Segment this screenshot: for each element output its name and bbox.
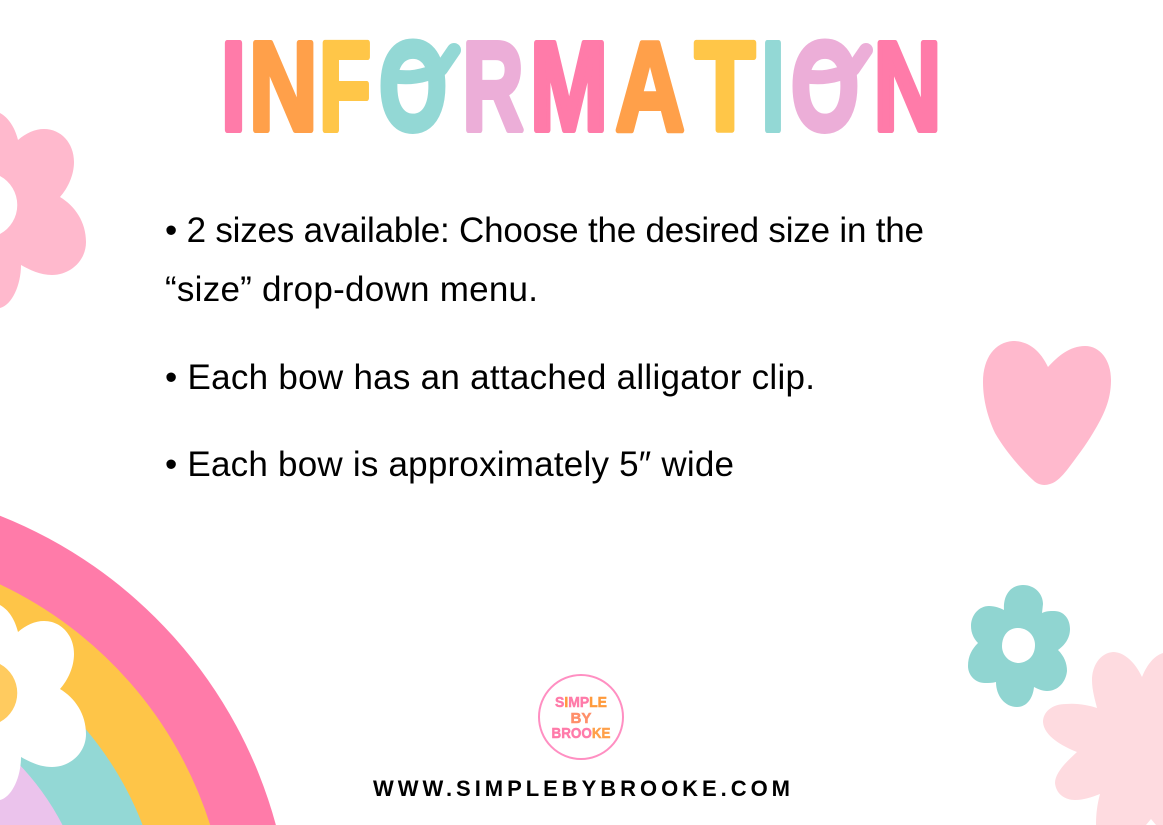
title [221, 16, 942, 157]
rainbow band: yellow [0, 584, 210, 825]
rainbow band: lilac [0, 746, 62, 825]
title: I [762, 16, 784, 157]
title: R [462, 16, 524, 157]
title: O [379, 16, 447, 157]
logo text: BY [570, 710, 592, 727]
bullet: sizes: • 2 sizes available: Choose the desired size in the [165, 211, 924, 250]
logo text: BROOKE [552, 725, 610, 742]
flower: pink top left [0, 113, 86, 308]
title: M [530, 16, 608, 157]
flower: white on rainbow [0, 605, 86, 800]
bullet: bow width: • Each bow is approximately 5″ wide [165, 445, 734, 484]
body text [165, 211, 924, 484]
flower: light pink bottom right [1043, 652, 1163, 825]
rainbow [0, 516, 276, 825]
title: O [791, 16, 859, 157]
rainbow band: teal [0, 657, 143, 825]
bullet: alligator clip: • Each bow has an attached alligator clip. [165, 358, 815, 397]
flower: teal [968, 585, 1070, 707]
icon: heart [983, 341, 1111, 485]
logo text [552, 694, 610, 742]
title: I [221, 16, 246, 157]
rainbow band: pink [0, 516, 276, 825]
title: T [695, 16, 755, 157]
logo [539, 675, 623, 759]
title: N [249, 16, 318, 157]
website url: WWW.SIMPLEBYBROOKE.COM [373, 776, 790, 801]
title: F [319, 16, 371, 157]
bullet: sizes continued: “size” drop-down menu. [165, 270, 538, 309]
title: A [616, 16, 684, 157]
logo text: SIMPLE [555, 694, 607, 711]
title: N [874, 16, 942, 157]
logo ring [539, 675, 623, 759]
